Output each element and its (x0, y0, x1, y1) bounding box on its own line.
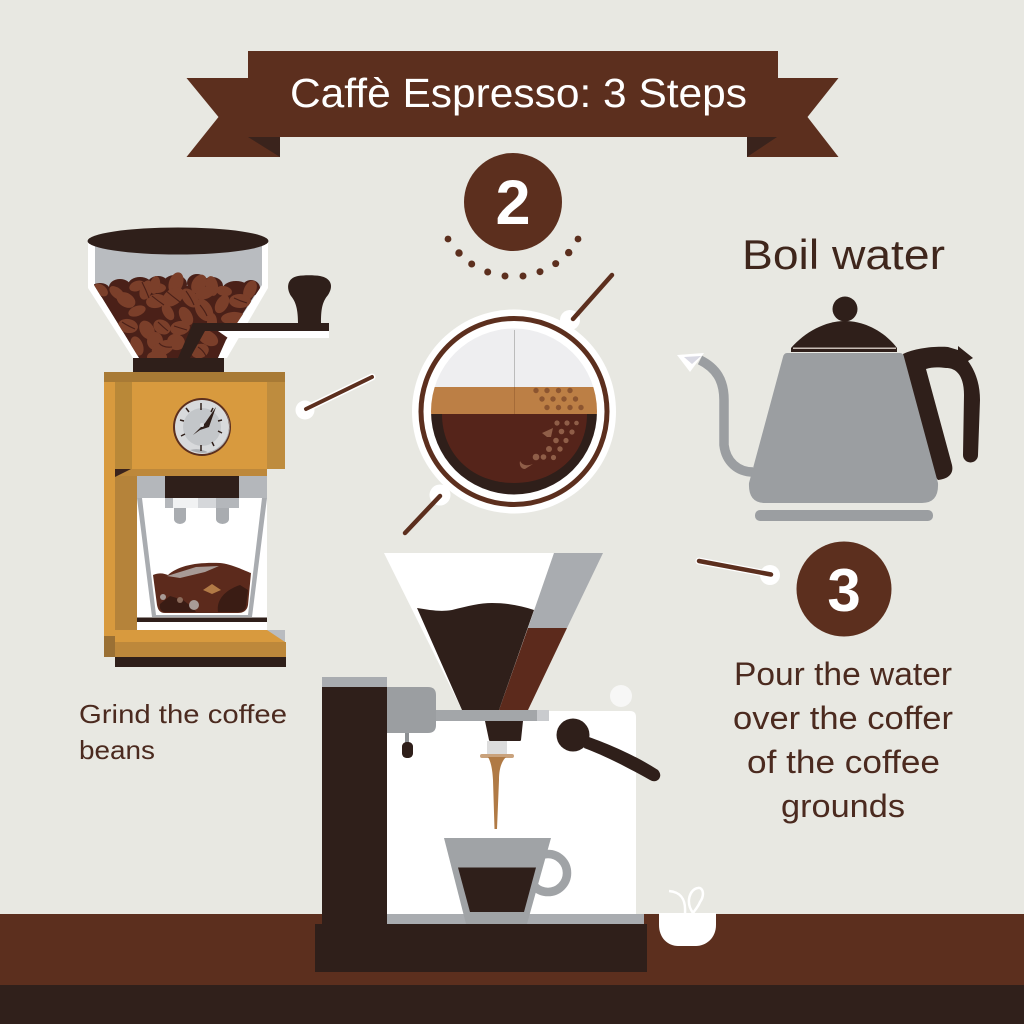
text: pour the water: over the coffer (733, 700, 953, 736)
text: pour the water: Pour the water (734, 656, 952, 692)
connector: step 3 (699, 561, 780, 585)
spout tip (677, 353, 704, 372)
column cap (322, 677, 387, 687)
dotted arc (445, 236, 581, 280)
step 2 badge (464, 153, 562, 251)
text: pour the water: grounds (781, 788, 905, 824)
group head (387, 687, 436, 733)
valve (402, 733, 413, 758)
step 3 badge (796, 542, 892, 636)
drip tray (387, 914, 644, 924)
grinder base (104, 630, 286, 667)
icon: kettle (677, 296, 980, 521)
crank handle (178, 323, 329, 358)
grinder body (104, 372, 285, 636)
icon: espresso machine (315, 553, 660, 972)
kettle plate (755, 510, 933, 521)
white dot (610, 685, 632, 707)
dripper cone (384, 553, 603, 710)
machine base (315, 924, 647, 972)
text: grind the coffee beans: Grind the coffee (79, 699, 287, 729)
text: grind the coffee beans (79, 699, 287, 765)
step 2 cup circle (405, 275, 616, 533)
connector bottom (405, 484, 450, 533)
hopper (88, 240, 268, 363)
gauge dial (173, 398, 231, 456)
icon: small white cup (659, 888, 716, 946)
kettle handle (903, 346, 980, 480)
title banner (186, 51, 838, 157)
machine column (322, 687, 387, 927)
hopper collar (133, 358, 224, 372)
counter (0, 914, 1024, 1024)
text: grind the coffee beans: beans (79, 735, 155, 765)
connector top (560, 275, 612, 330)
espresso cup (444, 838, 567, 924)
text: pour the water (733, 656, 953, 824)
crema dots (533, 388, 584, 410)
step 2 badge: 2 (495, 168, 531, 238)
filter outlet (480, 721, 523, 758)
coffee dots (520, 420, 579, 469)
grounds container (137, 476, 267, 622)
heading: boil water: Boil water (742, 231, 945, 278)
icon: grinder (88, 228, 331, 667)
step 3 badge: 3 (827, 557, 861, 624)
cup contents (430, 328, 598, 496)
text: pour the water: of the coffee (747, 744, 940, 780)
kettle spout (700, 360, 753, 472)
kettle lid (791, 296, 897, 352)
portafilter arm (436, 710, 549, 721)
coffee stream (488, 757, 506, 829)
kettle body (749, 353, 938, 503)
connector: grinder (296, 377, 372, 420)
steam lever (556, 718, 660, 781)
title: Caffè Espresso: 3 Steps (290, 70, 747, 116)
crank highlight (218, 331, 329, 338)
machine body (387, 711, 636, 915)
hopper lid (88, 228, 268, 254)
crank knob (288, 275, 331, 323)
